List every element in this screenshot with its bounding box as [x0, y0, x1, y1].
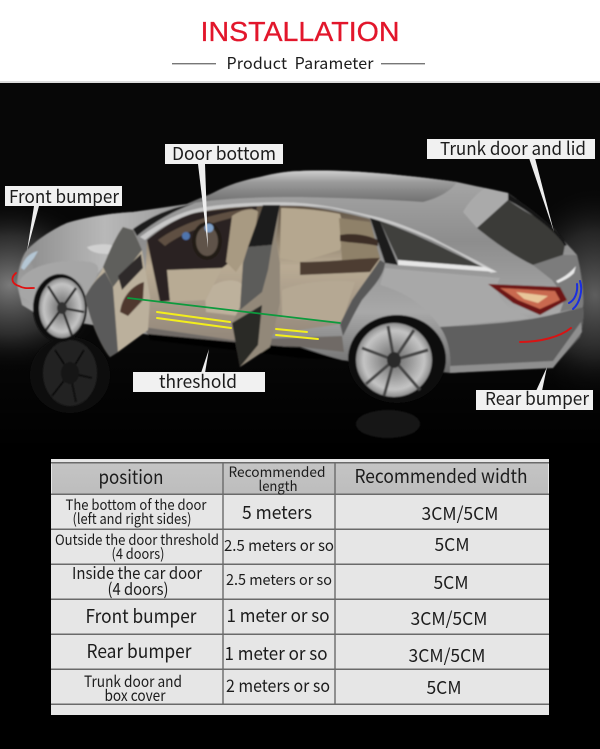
header labels: Recommended	[228, 462, 326, 482]
rear window	[477, 200, 565, 265]
table header row	[52, 463, 548, 494]
row: rear bumper	[86, 637, 486, 668]
dashboard	[147, 206, 257, 302]
row: bottom of the door: (left and right sides)	[72, 508, 192, 529]
header labels: position	[98, 463, 164, 490]
car body	[17, 171, 583, 373]
headlight	[21, 251, 38, 270]
row: trunk door and box cover: 2 meters or so	[226, 673, 330, 698]
row: inside car door: (4 doors)	[108, 576, 168, 600]
rear wheel	[348, 315, 446, 403]
label: Door bottom	[165, 140, 283, 248]
line: rear bumper red	[520, 328, 571, 342]
trunk highlight	[556, 266, 576, 283]
row: outside door threshold: (4 doors)	[112, 543, 164, 564]
label: Trunk door and lid: Trunk door and lid	[440, 135, 586, 161]
row: outside door threshold: Outside the door threshold	[55, 529, 219, 550]
header	[0, 0, 600, 83]
row: inside car door: Inside the car door	[72, 560, 203, 584]
rear door pillar	[370, 218, 398, 265]
row: outside door threshold	[55, 529, 470, 564]
line: front bumper red	[12, 273, 34, 288]
wheel reflections	[30, 337, 420, 438]
rear panel	[533, 255, 583, 312]
title: INSTALLATION	[200, 16, 400, 47]
side window	[380, 221, 485, 268]
label: threshold	[133, 349, 265, 394]
row: outside door threshold: 2.5 meters or so	[224, 534, 334, 556]
rear door (open)	[232, 205, 280, 367]
label: Rear bumper	[476, 367, 593, 411]
row: rear bumper: Rear bumper	[86, 637, 192, 664]
tail light	[488, 284, 567, 315]
row: trunk door and box cover	[84, 670, 462, 706]
rear door cut line	[340, 260, 385, 336]
header labels: length	[258, 476, 298, 496]
row: front bumper: 1 meter or so	[226, 602, 330, 628]
sill	[143, 327, 344, 352]
row: trunk door and box cover: 5CM	[426, 674, 462, 700]
row: trunk door and box cover: box cover	[104, 684, 166, 706]
label: Trunk door and lid	[427, 135, 595, 232]
label: Door bottom: Door bottom	[172, 140, 276, 166]
row: inside car door: 5CM	[434, 569, 468, 595]
label: Rear bumper: Rear bumper	[485, 385, 590, 411]
row: bottom of the door	[66, 494, 498, 529]
header labels	[98, 462, 528, 496]
table background	[51, 459, 549, 715]
windshield edge dark band	[133, 203, 195, 236]
front wheel	[33, 274, 87, 342]
line: threshold yellow	[157, 312, 318, 339]
row: trunk door and box cover: Trunk door and	[84, 670, 182, 692]
roof highlight	[187, 171, 457, 204]
row: bottom of the door: 3CM/5CM	[422, 500, 498, 526]
label: Front bumper: Front bumper	[9, 183, 120, 209]
row: bottom of the door: 5 meters	[242, 499, 312, 525]
car	[17, 171, 583, 438]
row: outside door threshold: 5CM	[434, 531, 470, 557]
row: bottom of the door: The bottom of the door	[66, 494, 207, 515]
label: threshold: threshold	[159, 368, 237, 394]
window chrome	[398, 260, 497, 272]
line: trunk blue	[569, 281, 581, 309]
steering wheel	[194, 224, 220, 258]
rear quarter highlight	[380, 268, 530, 327]
row: inside car door	[72, 560, 468, 600]
hood	[27, 206, 183, 284]
side roof rail	[140, 202, 497, 273]
door opening interior	[143, 206, 380, 340]
row: front bumper: 3CM/5CM	[410, 605, 488, 631]
header labels: Recommended width	[354, 462, 528, 489]
row: rear bumper: 1 meter or so	[224, 640, 328, 666]
rear interior seats	[280, 208, 380, 322]
rear spoiler panel	[463, 188, 508, 228]
row: inside car door: 2.5 meters or so	[226, 569, 332, 590]
rear bumper shading	[440, 307, 583, 373]
row: front bumper: Front bumper	[86, 602, 197, 629]
front door (open)	[85, 227, 150, 357]
photo: car in dark studio	[0, 83, 600, 450]
row: rear bumper: 3CM/5CM	[408, 642, 486, 668]
fender	[20, 261, 98, 305]
label: Front bumper	[5, 183, 122, 251]
front seat	[205, 280, 243, 316]
installation lines	[12, 273, 581, 342]
specification table	[51, 459, 549, 715]
line: door bottom green	[128, 298, 340, 323]
row: front bumper	[86, 602, 488, 631]
subtitle: Product Parameter	[226, 50, 374, 74]
